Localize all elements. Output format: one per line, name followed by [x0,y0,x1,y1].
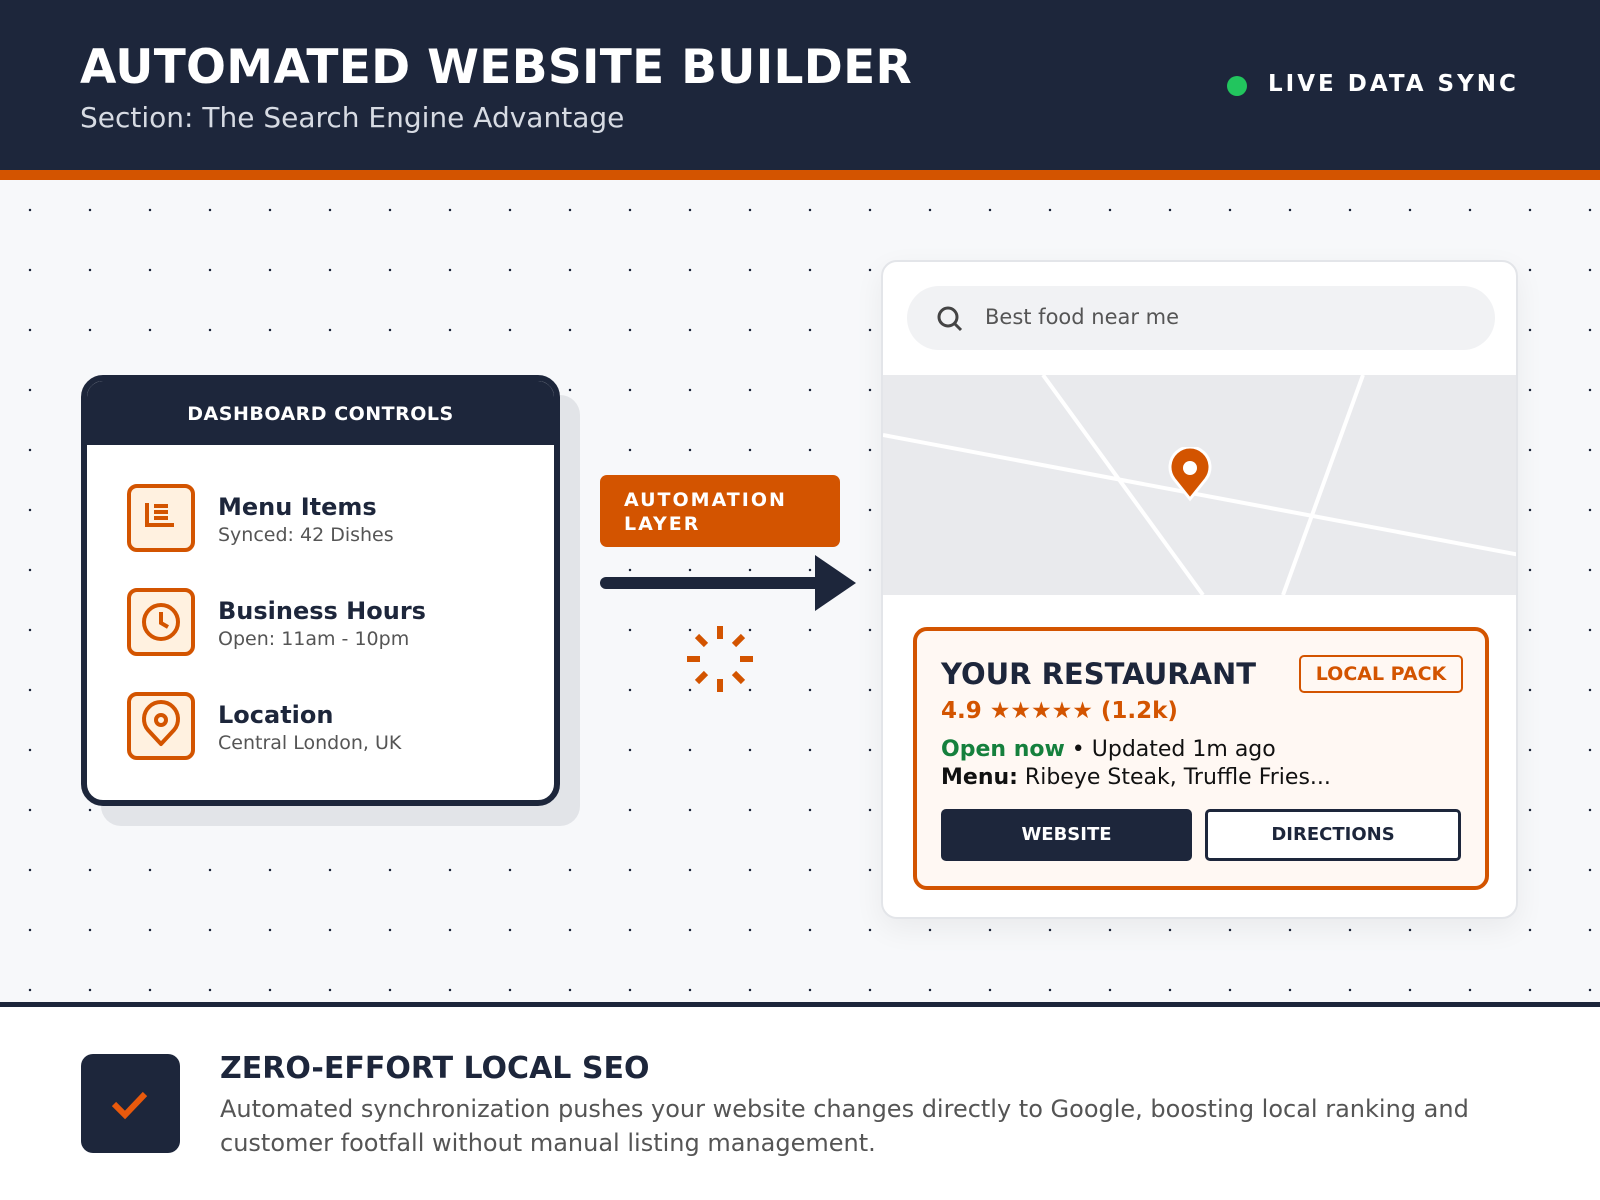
icon: location pin [127,692,195,760]
icon: menu list [127,484,195,552]
item: location: Central London, UK [218,732,401,754]
footer text: Automated synchronization pushes your website changes directly to Google, boosting local ranking and customer footfall without manual listing management. [220,1095,1469,1157]
header [0,0,1600,180]
status text [941,737,1331,790]
item: location: Location [218,701,333,729]
footer [0,1002,1600,1200]
title: AUTOMATED WEBSITE BUILDER [80,40,912,95]
footer heading: ZERO-EFFORT LOCAL SEO [220,1051,649,1086]
icon: green dot [1227,76,1247,96]
item: business hours: Business Hours [218,597,426,625]
button: website: WEBSITE [1021,824,1112,845]
item: menu items: Menu Items [218,493,377,521]
local pack badge: LOCAL PACK [1316,663,1446,685]
item: business hours: Open: 11am - 10pm [218,628,409,650]
map [883,375,1520,595]
main dotted background [0,180,1600,1002]
panel: dashboard controls [81,375,580,826]
item: business hours [127,588,426,656]
subtitle: Section: The Search Engine Advantage [80,101,624,134]
heading [87,381,554,445]
search bar: Best food near me [985,305,1179,329]
rating: 4.9 ★★★★★ (1.2k) [941,698,1178,724]
search bar [907,286,1495,350]
heading: DASHBOARD CONTROLS [187,403,454,425]
local pack badge [1299,655,1463,693]
button: directions [1205,809,1461,861]
status text: Open now • Updated 1m ago [941,737,1276,762]
local pack result card: YOUR RESTAURANT [941,657,1256,691]
automation layer label: AUTOMATION [624,489,787,511]
item: menu items: Synced: 42 Dishes [218,524,394,546]
local pack result card [913,627,1489,890]
arrow [600,555,856,611]
button: directions: DIRECTIONS [1271,824,1395,845]
button: website [941,809,1192,861]
icon: checkmark box [81,1054,180,1153]
icon: map pin [1168,447,1212,501]
icon: magnifier [938,306,962,331]
item: location [127,692,402,760]
item: menu items [127,484,394,552]
status text: Menu: Ribeye Steak, Truffle Fries... [941,765,1331,790]
panel: search results [881,260,1518,919]
automation layer label: LAYER [624,513,700,535]
icon: clock [127,588,195,656]
live data sync badge: LIVE DATA SYNC [1268,71,1519,97]
automation layer label [600,475,840,547]
icon: loading spinner [687,626,753,692]
